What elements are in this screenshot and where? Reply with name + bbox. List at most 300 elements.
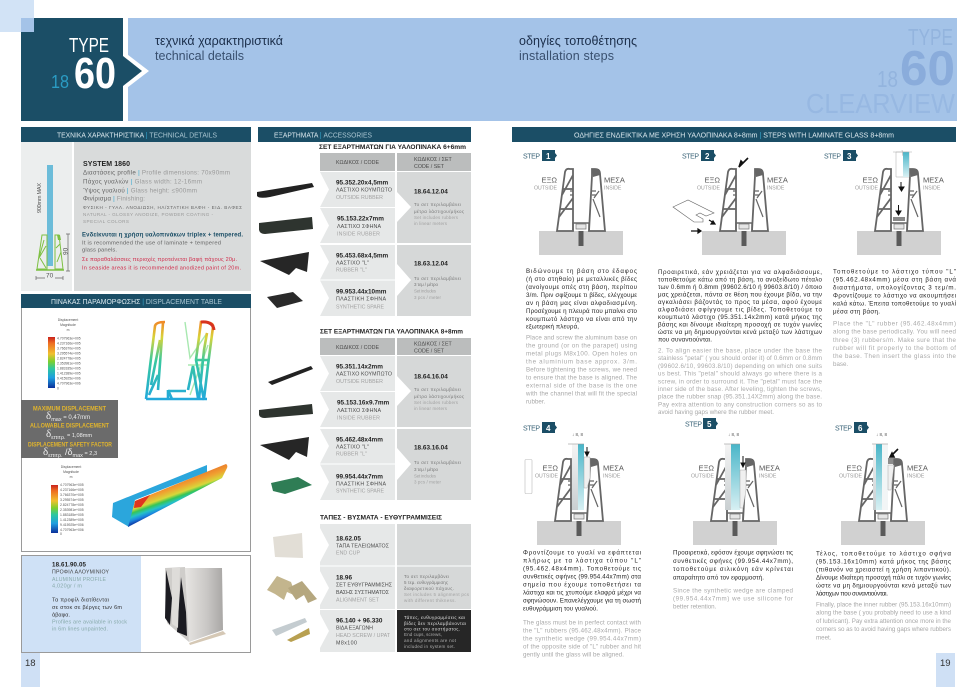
legend: displacement scale 1: 3.295574e+005 [57,352,81,356]
row: outside rubber [336,364,392,385]
stats box: displacement values: ALLOWABLE DISPLACEMENT [30,424,109,430]
page number 19 [936,653,955,687]
note: alignment set contents [404,573,470,603]
stats box: displacement values: = 2,3 [83,451,97,457]
legend: displacement scale 2: 0 [60,532,62,536]
step 4 text: λάστιχα και τις χτυπούμε ελαφρά μέχρι να [523,590,641,596]
step 1 diagram: ΜΕΣΑ [604,176,625,184]
stats box: displacement values: δ [46,410,51,422]
step 3 diagram: INSIDE [923,186,941,192]
row: alignment set [336,574,393,604]
row: rubber L: ΛΑΣΤΙΧΟ "L" [336,260,369,266]
legend: displacement scale 2: 4.237166e+005 [60,488,84,492]
step 5 diagram: ΕΞΩ [699,464,714,472]
stats box: displacement values: DISPLACEMENT SAFETY FACTOR [28,442,113,448]
system specifications text: Φινίρισμα | Finishing: [83,196,145,202]
step 1 text: to ensure that the base is aligned. The [526,374,638,382]
table: set 8+8mm: ΚΩΔΙΚΟΣ / CODE [336,345,379,351]
note: not included items: included in system set. [404,644,455,649]
stats box: displacement values: /δ [62,447,73,457]
legend: displacement scale 2: m [70,475,73,479]
aluminium profile text: ΠΡΟΦΙΛ ΑΛΟΥΜΙΝΙΟΥ [52,570,110,576]
legend: displacement scale 1: 4.707963e+005 [57,336,81,340]
step 3 text: (95.462.48x4mm) μέσα στη βάση ανά [833,276,956,284]
set code: 18.64.16.04: 18.64.16.04 [414,374,448,380]
set code: 18.63.16.04: 3 τεμ / μέτρο [414,466,438,472]
note: not included items: Τάπες, ευθυγραμμίσεις και [404,614,465,620]
recommendation text [82,232,243,254]
row: outside rubber: OUTSIDE RUBBER [336,195,383,201]
step 4 diagram: INSIDE [603,474,621,480]
row: end cap [336,536,390,556]
watermark logo [806,24,956,119]
step 1 text: Βιδώνουμε τη βάση στο έδαφος [526,268,637,275]
step 4 text: of the opposite side of "L" rubber and hit [523,644,641,650]
step 4 diagram: ΜΕΣΑ [603,464,624,472]
type logo block: TYPE [69,35,109,57]
step 5 diagram: ↓ 8, 8 [728,432,740,437]
warning text: In seaside areas it is recommended anodized paint of 20m. [82,266,241,272]
step 2 text: βάσης και δίνουμε ιδιαίτερη προσοχή σε τυχόν γωνίες [658,322,822,328]
set code: 18.64.12.04 [414,188,465,226]
legend: displacement scale 2: 3.766370e+005 [60,493,84,497]
stats box: displacement values: max [51,417,62,423]
step 6 badge: 6 [858,424,863,433]
row: outside rubber: 95.352.20x4,5mm [336,180,389,186]
type logo block: 18 [51,72,69,92]
row: synthetic spare: 99.953.44x10mm [336,288,387,296]
step 5 badge [685,418,718,429]
set code: 18.63.16.04: 3 pcs / meter [414,480,442,484]
set code: 18.63.16.04: 18.63.16.04 [414,444,448,452]
system specifications text: Ύψος γυαλιού | Glass height: ≤900mm [83,188,197,194]
legend: displacement scale 1: Displacement [58,318,78,322]
row: outside rubber: ΛΑΣΤΙΧΟ ΚΟΥΜΠΩΤΟ [336,188,392,194]
step 1 text: (ανοίγουμε οπές στη βάση, περίπου [526,284,638,291]
system specifications text: SYSTEM 1860 [83,161,130,168]
stats box: displacement values: επιτρ. [51,435,66,441]
title: installation steps: installation steps [519,49,614,63]
step 1 text: the ground (or on the parapet) using [526,342,638,350]
step 6 text: Finally, place the inner rubber (95.153.16x10mm) [816,602,951,608]
step 5 text [673,550,794,610]
set code: 18.64.12.04: Set includes rubbers [414,215,459,220]
legend: displacement scale 1: Magnitude [60,323,76,327]
row: rubber L: RUBBER "L" [336,268,367,274]
step 1 text: εξωτερική πλευρά, [526,324,579,330]
step 1 badge [523,150,557,161]
row: inside rubber: 95.153.22x7mm [337,216,384,222]
step 6 text: corners so as to avoid having gaps where rubbers [816,626,951,633]
stats box: displacement values: δ [46,428,51,440]
row: alignment set: 18.96 [336,574,352,582]
step 3 diagram: ΕΞΩ [863,176,878,184]
step 6 text [816,550,952,642]
note: alignment set contents: Set includes 5 alignment pcs [404,592,470,597]
step 1 text: 3/m. Πριν σφίξουμε τι βίδες, ελέγχουμε [526,292,637,299]
set code: 18.64.16.04: in linear meters [414,406,448,411]
step 2 text [658,269,823,416]
step 2 text: Προαιρετικά, εάν χρειάζεται για να αλφαδιάσουμε, [658,269,822,276]
set code: 18.63.16.04 [414,444,461,484]
title: installation steps [519,34,637,63]
set code: 18.64.16.04: μέτρα λάστιχου/μήκος [414,393,465,399]
legend: displacement scale 1: 4.237166e+005 [57,342,81,346]
step 2 text: μας χρειάζεται, πάντα σε θέση που έχουμε βίδα, να την [658,292,822,298]
aluminium profile text: in 6m lines unpainted. [52,626,108,632]
step 1 badge: 1 [546,152,551,161]
step 4 text: The glass must be in perfect contact with [523,620,642,626]
note: alignment set contents: with different thikness. [404,598,456,603]
step 4 text: gently until the glass will be aligned. [523,652,624,658]
step 3 text: rubber will fit properly to the bottom of [833,345,956,352]
legend: displacement scale 1: 1.412389e+005 [57,372,81,376]
recommendation text: glass panels. [82,248,117,254]
legend: displacement scale 2: 1.412389e+005 [60,518,84,522]
aluminium profile text: Profiles are available in stock [52,620,127,626]
row: synthetic spare: ΠΛΑΣΤΙΚΗ ΣΦΗΝΑ [336,296,386,302]
note: not included items: End cups, screws, [404,632,442,637]
legend: displacement scale 1: 3.766370e+005 [57,346,81,350]
table: set 8+8mm [320,338,471,500]
step 1 text: with the channel that will fit the special [525,390,637,398]
heading: steps [512,127,956,142]
row: inside rubber: ΛΑΣΤΙΧΟ ΣΦΗΝΑ [337,408,381,414]
stats box: displacement values: δ [43,446,48,458]
legend: displacement scale 2: 2.353981e+005 [60,508,84,512]
stats box: displacement values: = 0,47mm [62,415,90,421]
step 4 badge: 4 [546,424,551,433]
photo: alignment shims [267,576,317,603]
step 1 diagram: INSIDE [604,186,622,192]
photo: spare wedge 8+8 [271,477,312,494]
legend: displacement scale 2: 4.707963e+005 [60,483,84,487]
step 1 text [525,268,638,406]
step 6 text: Δίνουμε ιδιαίτερη προσοχή πάλι σε τυχόν γωνίες [816,574,951,582]
panel: displacement table [21,308,250,552]
step 1 text: αν η βάση μας είναι αλφαδιασμένη. [526,300,637,307]
set code: 18.63.12.04: Set includes [414,288,437,294]
aluminium profile text [52,562,127,632]
stats box: displacement values: = 1,08mm [66,433,92,439]
note: not included items: βίδες δεν περιλαμβάνονται [404,620,466,626]
step 4 text: Φροντίζουμε το γυαλί να εφάπτεται [523,550,642,556]
legend: displacement scale 1: 4.707963e+006 [57,382,81,386]
step 5 badge: 5 [707,420,712,429]
step 1 text: metal plugs M8x100. Open holes on [526,350,638,358]
step 2 diagram: INSIDE [767,186,785,192]
photo: aluminium profile [165,567,226,645]
row: alignment set: ΣΕΤ ΕΥΘΥΓΡΑΜΜΙΣΗΣ [336,582,393,588]
step 2 text: των 0.6mm ή 0.8mm (99602.6/10 ή 99603.8/10) / όποιο [658,284,823,291]
step 2 text: 2. To align easier the base, place under the base the [658,348,823,354]
row: outside rubber: 95.351.14x2mm [336,364,383,370]
stats box: displacement values: max [73,453,83,459]
note: not included items [397,610,471,652]
step 2 text: ώστε να μη δημιουργούνται κενά μεταξύ των λάστιχων [658,329,822,336]
title: technical details [155,34,283,63]
step 4 diagram: ↓ 8, 8 [572,432,584,437]
row: alignment set: ALIGNMENT SET [336,598,380,604]
warning text [82,256,241,272]
photo: inside rubber 6+6 [259,217,313,234]
set code: 18.64.12.04: Το σετ περιλαμβάνει [414,201,461,207]
step 4 badge [523,422,557,433]
step 5 text: απαραίτητο από τον εφαρμοστή. [673,574,764,582]
row: alignment set: ΒΑΣΗΣ ΣΥΣΤΗΜΑΤΟΣ [336,590,390,596]
step 5 text: Since the synthetic wedge are clamped [673,588,794,594]
aluminium profile text: 18.61.90.05 [52,562,87,568]
step 2 text: inner side of the base. After leveling, tighten the screws, [658,386,822,393]
step 1 badge: STEP [523,154,540,160]
table: set 6+6mm: ΚΩΔΙΚΟΣ / ΣΕΤ [414,157,452,163]
step 4 text: the synthetic wedge (99.954.44x7mm) [523,636,641,642]
row: synthetic spare: 99.954.44x7mm [336,474,383,480]
table: caps, plugs, alignment [320,524,471,652]
chart: deformed 3d profile [112,464,227,527]
heading: technical details [21,127,251,142]
step 2 diagram: OUTSIDE [697,186,721,192]
step 2 badge [682,150,716,161]
title: technical details: τεχνικά χαρακτηριστικά [155,34,283,48]
step 5 text: τοποθετούμε σιλικόνη εάν κρίνεται [673,566,794,573]
step 6 diagram: INSIDE [907,474,925,480]
step 2 text: που συναντιούνται. [658,336,712,344]
note: alignment set contents: διαφορετικού πάχους. [404,585,454,591]
legend: displacement scale 2: 2.824778e+005 [60,503,84,507]
stats box: displacement values: MAXIMUM DISPLACEMENT [33,406,106,412]
step 1 text: Place and screw the aluminum base on [526,334,638,342]
row: inside rubber: INSIDE RUBBER [337,232,380,238]
row: rubber L: 95.462.48x4mm [336,436,383,444]
row: end cap: 18.62.05 [336,536,361,542]
row: rubber L: RUBBER "L" [336,452,367,458]
step 1 diagram: OUTSIDE [534,186,558,192]
step 4 diagram: ΕΞΩ [543,464,558,472]
row: synthetic spare: SYNTHETIC SPARE [336,304,384,310]
step 4 badge: STEP [523,426,540,432]
step 1 text: (ή στο στηθαίο) με μεταλλικές βίδες [526,276,637,283]
title: technical details: technical details [155,49,244,63]
aluminium profile text: Τα προφίλ διατίθενται [52,598,110,604]
row: inside rubber: ΛΑΣΤΙΧΟ ΣΦΗΝΑ [337,224,381,230]
step 6 diagram: OUTSIDE [839,474,863,480]
legend: displacement scale 2: Displacement [61,465,81,469]
legend: displacement scale 1: 2.824778e+005 [57,356,81,360]
row: inside rubber: INSIDE RUBBER [337,416,380,422]
step 5 badge: STEP [685,422,702,428]
step 5 text: (99.954.44x7mm) we use silicone for [673,596,793,602]
row: synthetic spare [336,474,386,494]
diagram: profile section: 900mm MAX [37,183,43,213]
step 3 text: Τοποθετούμε το λάστιχο τύπου "L" [833,268,956,276]
system specifications text: Πάχος γυαλιών | Glass width: 12-16mm [83,178,202,186]
step 6 badge [835,422,869,433]
step 2 text: κουμπωτό λάστιχο (95.351.14x2mm) κατά μήκος της [658,314,822,321]
row: head screw [336,618,391,646]
step 4 text: συνθετικές σφήνες (99.954.44x7mm) στα [523,574,641,580]
heading: displacement table: ΠΙΝΑΚΑΣ ΠΑΡΑΜΟΡΦΩΣΗΣ | DISPLACEMENT TABLE [51,297,222,306]
heading: steps: ΟΔΗΓΙΕΣ ΕΝΔΕΙΚΤΙΚΑ ΜΕ ΧΡΗΣΗ ΥΑΛΟΠΙΝΑΚΑ 8+8mm | STEPS WITH LAMINATE GLASS 8+8mm [574,130,894,140]
set code: 18.64.16.04 [414,374,465,411]
panel: aluminium profile [22,556,250,652]
row: end cap: ΤΑΠΑ ΤΕΛΕΙΩΜΑΤΟΣ [336,544,390,550]
legend: displacement scale 2: 9.415925e+006 [60,523,84,527]
row: rubber L: ΛΑΣΤΙΧΟ "L" [336,444,369,450]
diagram: profile section: 90 [62,247,70,255]
step 2 badge: STEP [682,154,699,160]
step 6 diagram: ΜΕΣΑ [907,464,928,472]
set code: 18.63.12.04: 3 τεμ / μέτρο [414,281,438,287]
legend: displacement scale 2: 4.707963e+006 [60,528,84,532]
step 1 text: rubber. [526,398,546,406]
row: rubber L [336,436,383,458]
step 6 text: of lubricant). Pay extra attention once more in the [816,618,952,625]
set code: 18.63.12.04: 18.63.12.04 [414,260,448,268]
step 2 diagram: ΜΕΣΑ [767,176,788,184]
step 1 text: κουμπωτό λάστιχο να είναι από την [526,316,637,323]
step 2 badge: 2 [705,152,710,161]
system specifications text: SPECIAL COLORS [83,219,129,224]
system specifications text: ΦΥΣΙΚΗ - ΓΥΑΛ. ΑΝΟΔΙΩΣΗ, ΗΛ/ΣΤΑΤΙΚΗ ΒΑΦΗ - ΕΙΔ. ΒΑΦΕΣ [83,205,242,210]
step 4 text: πλήρως με τα λάστιχα τύπου "L" [523,558,641,564]
step 2 text: stainless "petal" ( you should order it) of 0.6mm or 0.8mm [658,355,822,362]
legend: displacement scale 2: 1.883185e+005 [60,513,84,517]
step 1 diagram [534,169,625,255]
row: inside rubber [337,216,384,238]
row: head screw: ΒΙΔΑ ΕΞΑΓΩΝΗ [336,626,373,632]
step 3 diagram: ΜΕΣΑ [923,176,944,184]
step 6 text: (πιθανόν να χρειαστεί η χρήση λιπαντικού). [816,566,951,574]
row: synthetic spare: ΠΛΑΣΤΙΚΗ ΣΦΗΝΑ [336,482,386,488]
stats box: displacement values [21,400,118,459]
background corner square [0,0,34,32]
step 2 diagram: ΕΞΩ [705,176,720,184]
step 3 text: base. [833,361,848,368]
step 3 text: three (3) rubbers/m. Make sure that the [833,337,957,344]
warning text: Σε παραθαλάσσιες περιοχές προτείνεται βαφή πάχους 20μ. [82,256,237,263]
heading: accessories [258,127,471,142]
step 6 text: along the base ( you probably need to use a kind [816,610,952,617]
step 3 badge [824,150,858,161]
page number 19: 19 [940,658,951,669]
step 3 text [833,268,957,368]
step 6 badge: STEP [835,426,852,432]
legend: displacement scale 1: m [67,328,70,332]
recommendation text: Ενδείκνυται η χρήση υαλοπινάκων triplex + tempered. [82,232,243,238]
row: head screw: HEAD SCREW / UPAT [336,633,391,639]
legend: displacement scale 1: 0 [57,386,59,390]
heading: set 8+8mm: ΣΕΤ ΕΞΑΡΤΗΜΑΤΩΝ ΓΙΑ ΥΑΛΟΠΙΝΑΚΑ 8+8mm [320,328,463,336]
step 4 text: σημεία που έχουμε τοποθετήσει τα [523,582,641,588]
set code: 18.64.16.04: Το σετ περιλαμβάνει [414,386,461,392]
step 4 text: the "L" rubbers (95.462.48x4mm). Place [523,628,642,634]
row: head screw: M8x100 [336,640,357,646]
step 5 text: better retention. [673,604,717,610]
step 4 text: σφηνώσουν. Επανελέγχουμε για τη σωστή [523,598,642,604]
photo: outside rubber 6+6 [257,183,314,198]
watermark logo: 18 [877,66,898,92]
set code: 18.64.16.04: Set includes rubbers [414,400,459,405]
diagram: profile section [36,165,70,280]
row: outside rubber: ΛΑΣΤΙΧΟ ΚΟΥΜΠΩΤΟ [336,372,392,378]
legend: displacement scale 2 [51,465,84,536]
photo: inside rubber 8+8 [259,404,313,418]
step 5 text: συνθετικές σφήνες (99.954.44x7mm), [673,558,793,565]
panel: technical details [21,142,251,291]
set code: 18.64.12.04: in linear meters [414,221,448,226]
aluminium profile text: ALUMINUM PROFILE [52,577,107,583]
step 3 text: διαστήματα, υπολογίζοντας 3 τεμ/m. [833,284,956,292]
photo: spare wedge 6+6 [267,292,303,308]
step 2 diagram [673,158,788,255]
table: set 6+6mm: ΚΩΔΙΚΟΣ / CODE [336,160,379,166]
set code: 18.63.16.04: Το σετ περιλαμβάνει [414,459,461,465]
step 1 text: the aluminium base approx. 3/m. [526,358,637,366]
step 1 text: external side of the base is the one [526,382,638,390]
aluminium profile text: σε στοκ σε βέργες των 6m [52,604,122,611]
system specifications text: Διαστάσεις profile | Profile dimensions: 70x90mm [83,170,230,176]
table: set 8+8mm: CODE / SET [414,348,445,354]
step 3 badge: STEP [824,154,841,160]
step 6 diagram [839,432,928,545]
set code: 18.63.12.04: 3 pcs / meter [414,295,442,300]
step 6 text: (95.153.16x10mm) κατά μήκος της βάσης [816,558,951,566]
step 4 text [523,550,642,658]
legend: displacement scale 1: 1.883185e+005 [57,366,81,370]
table: set 6+6mm [320,153,471,316]
system specifications text: NATURAL - GLOSSY ANODIZE, POWDER COATING - [83,212,213,217]
table: set 6+6mm: CODE / SET [414,164,445,170]
photo: outside rubber 8+8 [268,366,313,385]
step 3 text: μέσα στη βάση. [833,308,880,316]
chart: deformed profile section [146,322,214,400]
row: head screw: 96.140 + 96.330 [336,618,383,624]
heading: displacement table [21,294,251,308]
header band [128,18,957,121]
row: end cap: END CUP [336,550,360,556]
heading: set 6+6mm: ΣΕΤ ΕΞΑΡΤΗΜΑΤΩΝ ΓΙΑ ΥΑΛΟΠΙΝΑΚΑ 6+6mm [319,144,466,151]
step 3 text: Φροντίζουμε το λάστιχο να ακουμπήσει [833,292,957,300]
set code: 18.63.12.04: Το σετ περιλαμβάνει [414,275,461,281]
legend: displacement scale 2: Magnitude [63,470,79,474]
step 2 text: (99602.6/10, 99603.8/10) depending on which one suits [658,363,822,370]
step 6 diagram: ↓ 8, 8 [876,432,888,437]
stats box: displacement values: επιτρ. [48,453,63,459]
type logo block [21,18,149,121]
row: rubber L: 95.453.68x4,5mm [336,252,389,260]
type logo block: 60 [74,49,116,98]
step 4 diagram [525,432,624,545]
recommendation text: It is recommended the use of laminate + tempered [82,240,221,246]
step 4 text: (95.462.48x4mm). Τοποθετούμε τις [523,566,641,572]
page number 18: 18 [25,658,36,669]
row: outside rubber [336,180,392,201]
step 4 diagram: OUTSIDE [535,474,559,480]
legend: displacement scale 1 [48,318,81,390]
watermark logo: 60 [900,42,955,96]
row: outside rubber: OUTSIDE RUBBER [336,379,383,385]
note: alignment set contents: Το σετ περιλαμβάνει [404,573,449,579]
step 3 text: along the base periodically. You will need [833,329,957,336]
step 3 diagram [855,150,944,255]
legend: displacement scale 1: 9.415925e+006 [57,376,81,380]
step 3 text: καλά κάτω. Έπειτα τοποθετούμε το γυαλί [833,300,957,308]
step 2 text: τοποθετούμε κάτω από τη βάση, το ανοξείδωτο πέταλο [658,276,823,284]
step 5 diagram: OUTSIDE [691,474,715,480]
heading: technical details: ΤΕΧΝΙΚΑ ΧΑΡΑΚΤΗΡΙΣΤΙΚΑ | TECHNICAL DETAILS [57,130,217,140]
row: synthetic spare: SYNTHETIC SPARE [336,488,384,494]
